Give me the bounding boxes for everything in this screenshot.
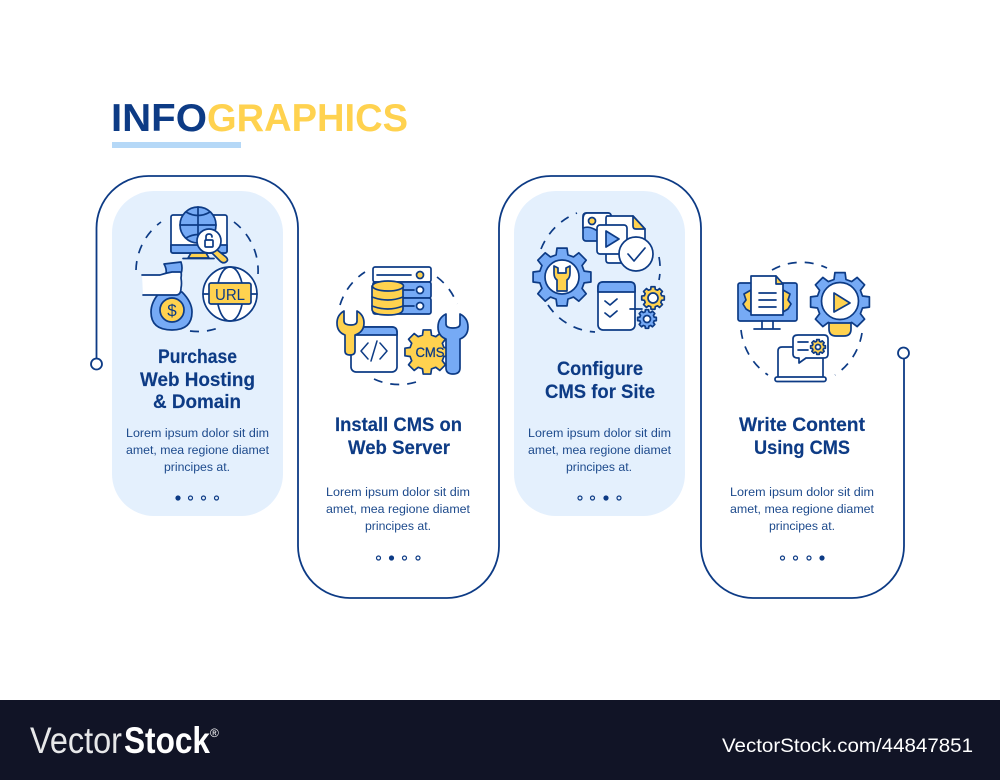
icon glyph: dollar: $ <box>167 301 177 320</box>
text block: step 2: amet, mea regione diamet <box>326 502 471 516</box>
icon: install CMS on web server <box>337 267 468 385</box>
title: INFO <box>111 97 207 140</box>
pagination dots: step 3 <box>578 496 621 500</box>
footer logo: Vector <box>30 720 122 761</box>
footer image id: VectorStock.com/44847851 <box>722 736 973 757</box>
heading: step 2 <box>335 414 462 459</box>
heading: step 4: Using CMS <box>754 437 850 459</box>
text block: step 2 <box>326 485 471 533</box>
text block: step 1: principes at. <box>164 460 230 474</box>
text block: step 1 <box>126 426 270 474</box>
footer bar <box>0 700 1000 780</box>
panel: step 3 background <box>514 191 685 516</box>
text block: step 4 <box>730 485 875 533</box>
connecting outline <box>96 176 904 598</box>
text block: step 1: Lorem ipsum dolor sit dim <box>126 426 269 440</box>
footer logo <box>30 720 219 761</box>
heading: step 1: Purchase <box>158 346 237 368</box>
heading: step 2: Install CMS on <box>335 414 462 436</box>
heading: step 1: & Domain <box>153 391 241 413</box>
text block: step 1: amet, mea regione diamet <box>126 443 270 457</box>
text block: step 3: amet, mea regione diamet <box>528 443 672 457</box>
text block: step 3 <box>528 426 672 474</box>
pagination dots: step 4 <box>780 556 824 560</box>
icon: web hosting and domain <box>136 207 258 332</box>
heading: step 1 <box>140 346 255 413</box>
text block: step 2: principes at. <box>365 519 431 533</box>
title <box>111 97 408 140</box>
heading: step 1: Web Hosting <box>140 369 255 391</box>
text block: step 3: Lorem ipsum dolor sit dim <box>528 426 671 440</box>
heading: step 4 <box>739 414 865 459</box>
footer logo: ® <box>210 726 219 740</box>
icon: write content <box>738 262 869 382</box>
label: URL: URL <box>215 287 245 304</box>
panel: step 1 background <box>112 191 283 516</box>
label: CMS: CMS <box>416 344 444 360</box>
end marker <box>898 348 909 358</box>
text block: step 4: Lorem ipsum dolor sit dim <box>730 485 874 499</box>
title underline <box>112 142 241 148</box>
start marker <box>91 358 102 370</box>
heading: step 3: Configure <box>557 358 643 380</box>
pagination dots: step 2 <box>376 556 420 560</box>
text block: step 2: Lorem ipsum dolor sit dim <box>326 485 470 499</box>
text block: step 4: amet, mea regione diamet <box>730 502 875 516</box>
pagination dots: step 1 <box>176 496 218 500</box>
icon: configure CMS <box>533 213 664 332</box>
text block: step 3: principes at. <box>566 460 632 474</box>
text block: step 4: principes at. <box>769 519 835 533</box>
heading: step 2: Web Server <box>348 437 450 459</box>
heading: step 4: Write Content <box>739 414 865 436</box>
title: GRAPHICS <box>207 97 408 140</box>
heading: step 3: CMS for Site <box>545 381 655 403</box>
heading: step 3 <box>545 358 655 403</box>
footer logo: Stock <box>124 720 210 761</box>
